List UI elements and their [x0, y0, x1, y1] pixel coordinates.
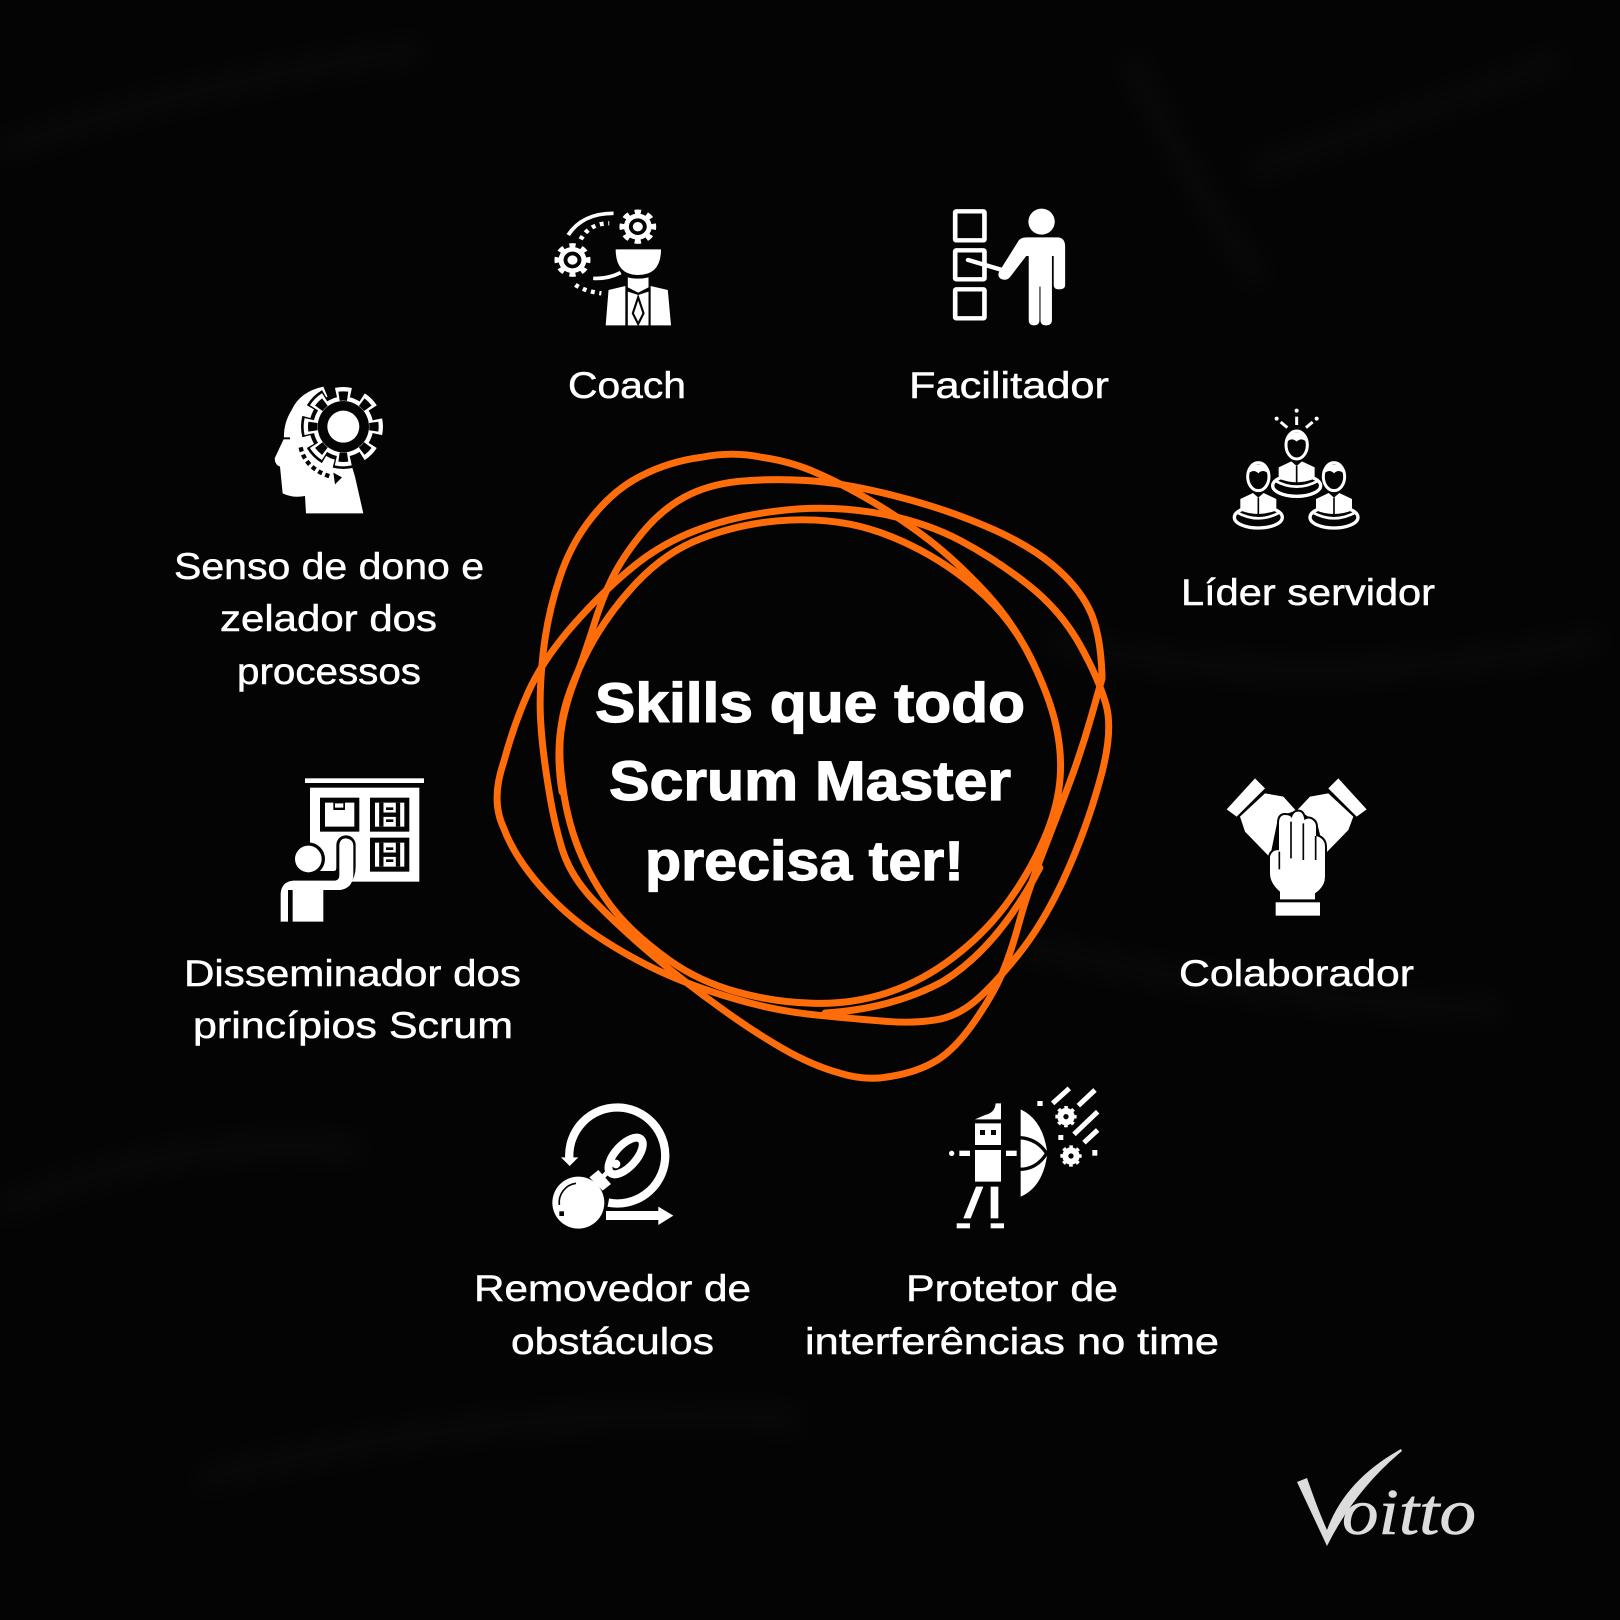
label: Coach [568, 365, 686, 406]
label: Líder servidor [1181, 572, 1435, 613]
title: Skills que todo [595, 671, 1025, 734]
item: Senso de dono [174, 387, 484, 692]
label [174, 546, 484, 692]
label: processos [237, 651, 421, 692]
label: Colaborador [1179, 953, 1414, 994]
icon: person at kanban board [281, 778, 424, 922]
label: Protetor de [906, 1268, 1118, 1309]
label: Senso de dono e [174, 546, 484, 587]
icon: person with umbrella deflecting gears [949, 1088, 1098, 1228]
title: Scrum Master [609, 749, 1011, 812]
scribbled orange circle [497, 454, 1109, 1078]
title: precisa ter! [645, 829, 964, 892]
item: Colaborador [1179, 778, 1414, 994]
icon: three leaders with rays [1234, 409, 1358, 528]
item: Facilitador [909, 209, 1109, 406]
logo: Voitto: oitto [1342, 1476, 1476, 1549]
label: interferências no time [805, 1321, 1219, 1362]
label: zelador dos [220, 598, 437, 639]
item: Protetor de interferências [805, 1088, 1219, 1362]
item: Líder servidor [1181, 409, 1435, 613]
icon: three stacked hands [1227, 778, 1367, 916]
label [474, 1268, 751, 1362]
icon: head with gear [275, 387, 381, 513]
label: princípios Scrum [193, 1005, 513, 1046]
label: Removedor de [474, 1268, 751, 1309]
icon: ball and chain with arrows [552, 1107, 673, 1229]
logo: Voitto [1297, 1449, 1476, 1549]
item: Removedor de obstáculos [474, 1107, 751, 1362]
label [805, 1268, 1219, 1362]
icon: coach with gears [557, 212, 671, 325]
icon: person pointing at checklist [955, 209, 1065, 325]
label [184, 953, 521, 1046]
item: Coach [557, 212, 686, 406]
title [595, 671, 1025, 892]
label: obstáculos [511, 1321, 714, 1362]
item: Disseminador [184, 778, 521, 1046]
label: Disseminador dos [184, 953, 521, 994]
label: Facilitador [909, 365, 1109, 406]
